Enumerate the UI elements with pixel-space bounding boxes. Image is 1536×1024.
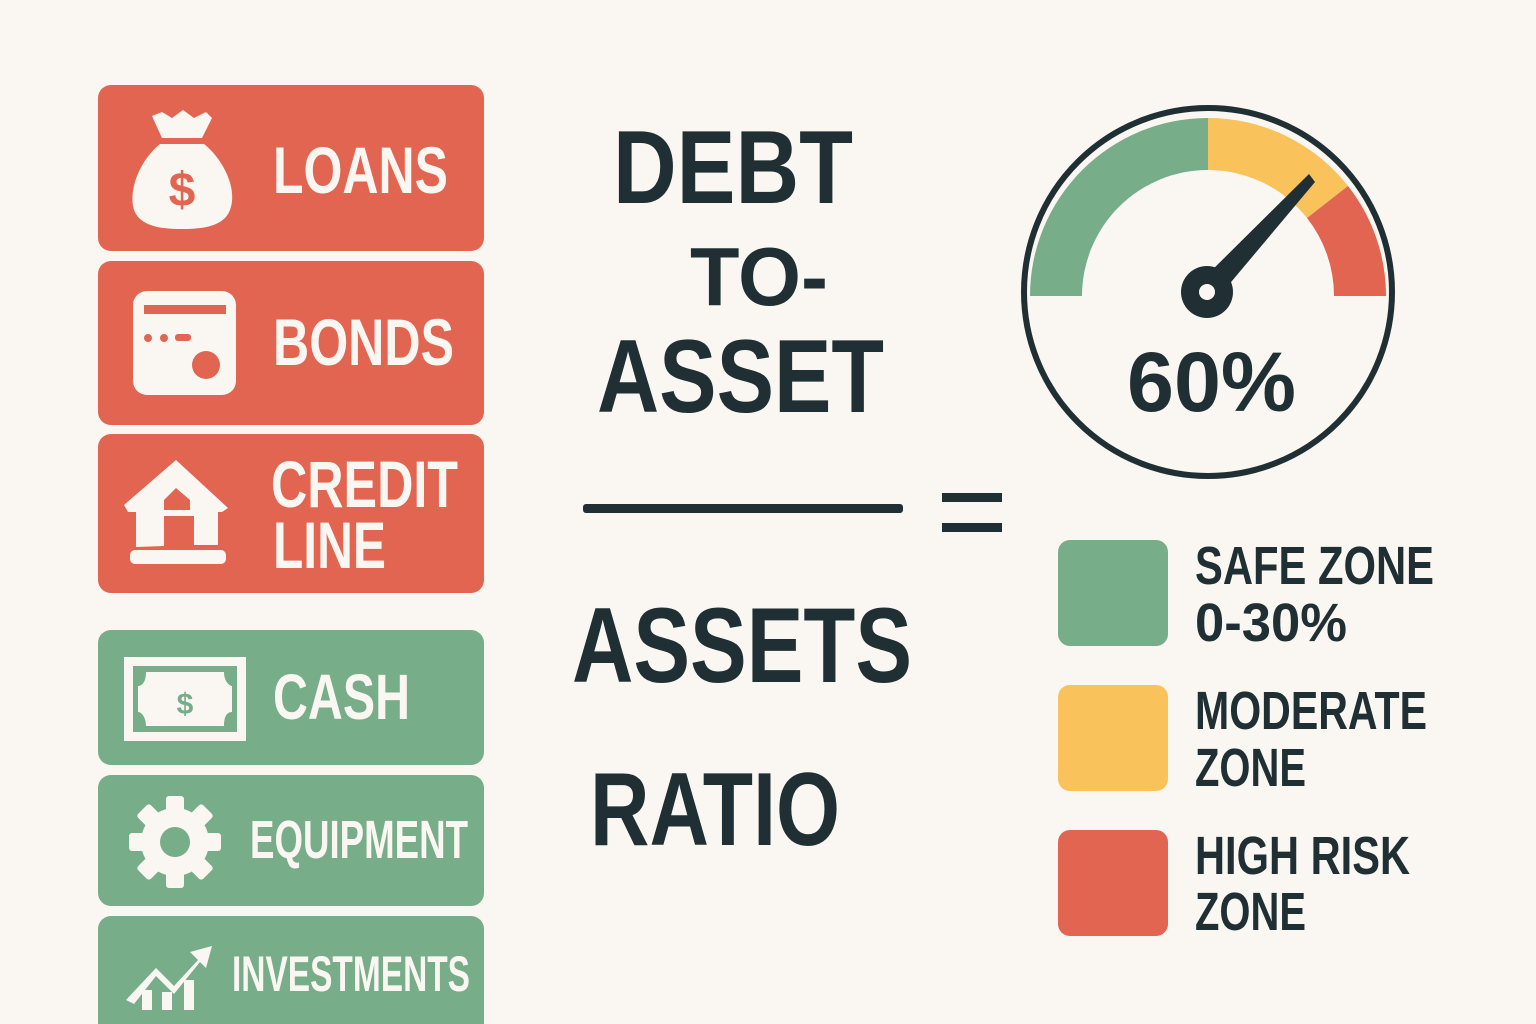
legend: high risk zone: HIGH RISK xyxy=(1195,826,1410,886)
legend: high risk zone xyxy=(1058,826,1410,942)
legend: moderate zone: ZONE xyxy=(1195,738,1306,798)
gauge value: 60% xyxy=(1127,335,1296,429)
gauge xyxy=(1024,108,1392,476)
legend: safe zone xyxy=(1058,536,1434,653)
denominator: assets ratio: ASSETS xyxy=(572,585,912,705)
icon: banknote xyxy=(124,657,246,741)
icon: card xyxy=(133,291,236,395)
denominator: assets ratio xyxy=(572,585,912,868)
panel: loans xyxy=(98,85,484,251)
panel: cash xyxy=(98,630,484,765)
panel: credit line: LINE xyxy=(273,508,386,582)
title: debt-to-asset xyxy=(597,110,884,435)
fraction line xyxy=(583,504,903,513)
panel: loans: LOANS xyxy=(273,133,448,207)
panel: credit line xyxy=(98,434,484,593)
legend xyxy=(1058,536,1434,942)
legend: high risk zone: ZONE xyxy=(1195,882,1306,942)
title: debt-to-asset: DEBT xyxy=(613,110,853,226)
panel: bonds: BONDS xyxy=(273,305,454,379)
title: debt-to-asset: TO- xyxy=(690,230,828,323)
panel: investments: INVESTMENTS xyxy=(232,946,470,1002)
icon: house xyxy=(124,460,228,564)
icon: money bag: $ xyxy=(169,164,196,217)
icon: gear xyxy=(129,796,221,888)
panel: equipment xyxy=(98,775,484,906)
panel: credit line: CREDIT xyxy=(271,447,458,521)
legend: safe zone: SAFE ZONE xyxy=(1195,536,1434,596)
equals sign xyxy=(942,493,1002,532)
icon: chart up xyxy=(126,946,212,1010)
panel: investments xyxy=(98,916,484,1024)
denominator: assets ratio: RATIO xyxy=(590,752,840,868)
needle xyxy=(1181,174,1315,318)
legend: moderate zone xyxy=(1058,681,1427,798)
panel: equipment: EQUIPMENT xyxy=(250,810,468,870)
panel: bonds xyxy=(98,261,484,425)
panel: cash: CASH xyxy=(273,661,410,733)
legend: moderate zone: MODERATE xyxy=(1195,681,1427,741)
legend: safe zone: 0-30% xyxy=(1195,593,1347,653)
icon: money bag xyxy=(132,110,232,229)
icon: banknote: $ xyxy=(177,688,194,721)
title: debt-to-asset: ASSET xyxy=(597,319,884,435)
